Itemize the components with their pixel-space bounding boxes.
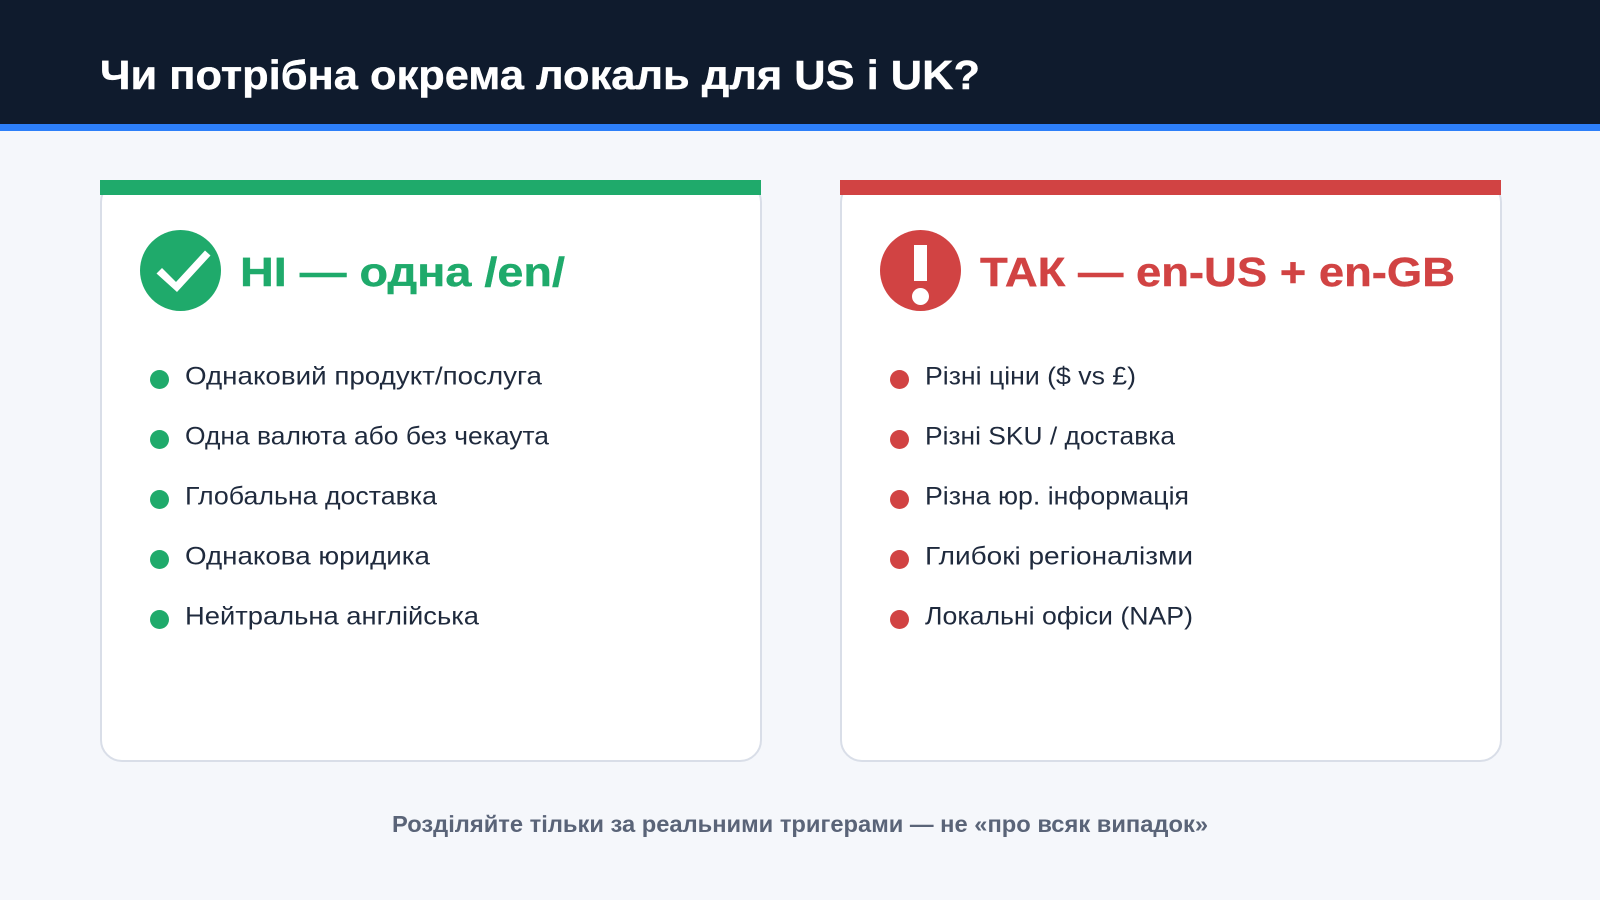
footer note: Розділяйте тільки за реальними тригерами — не «про всяк випадок» (392, 811, 1208, 837)
panel: separate locales (840, 180, 1501, 761)
heading: no: НІ — одна /en/ (240, 249, 565, 295)
list: yes reasons (890, 362, 1193, 630)
header band (0, 0, 1600, 131)
list: yes reasons: Різна юр. інформація (925, 482, 1189, 510)
list: no reasons: Однакова юридика (185, 542, 430, 570)
green top bar (100, 180, 761, 195)
list: no reasons (150, 362, 549, 630)
list: yes reasons: Локальні офіси (NAP) (925, 602, 1193, 630)
list: yes reasons: Різні SKU / доставка (925, 422, 1175, 450)
red top bar (840, 180, 1501, 195)
heading: yes: ТАК — en-US + en-GB (980, 249, 1455, 295)
list: yes reasons: Різні ціни ($ vs £) (925, 362, 1136, 390)
list: no reasons: Нейтральна англійська (185, 602, 479, 630)
card background (101, 181, 761, 761)
list: no reasons: Глобальна доставка (185, 482, 437, 510)
list: no reasons: Одна валюта або без чекаута (185, 422, 549, 450)
title: Чи потрібна окрема локаль для US і UK? (100, 52, 980, 98)
icon: exclamation mark (880, 230, 961, 311)
list: no reasons: Однаковий продукт/послуга (185, 362, 542, 390)
card background (841, 181, 1501, 761)
panel: no separate locale (100, 180, 761, 761)
icon: check mark (140, 230, 221, 311)
list: yes reasons: Глибокі регіоналізми (925, 542, 1193, 570)
